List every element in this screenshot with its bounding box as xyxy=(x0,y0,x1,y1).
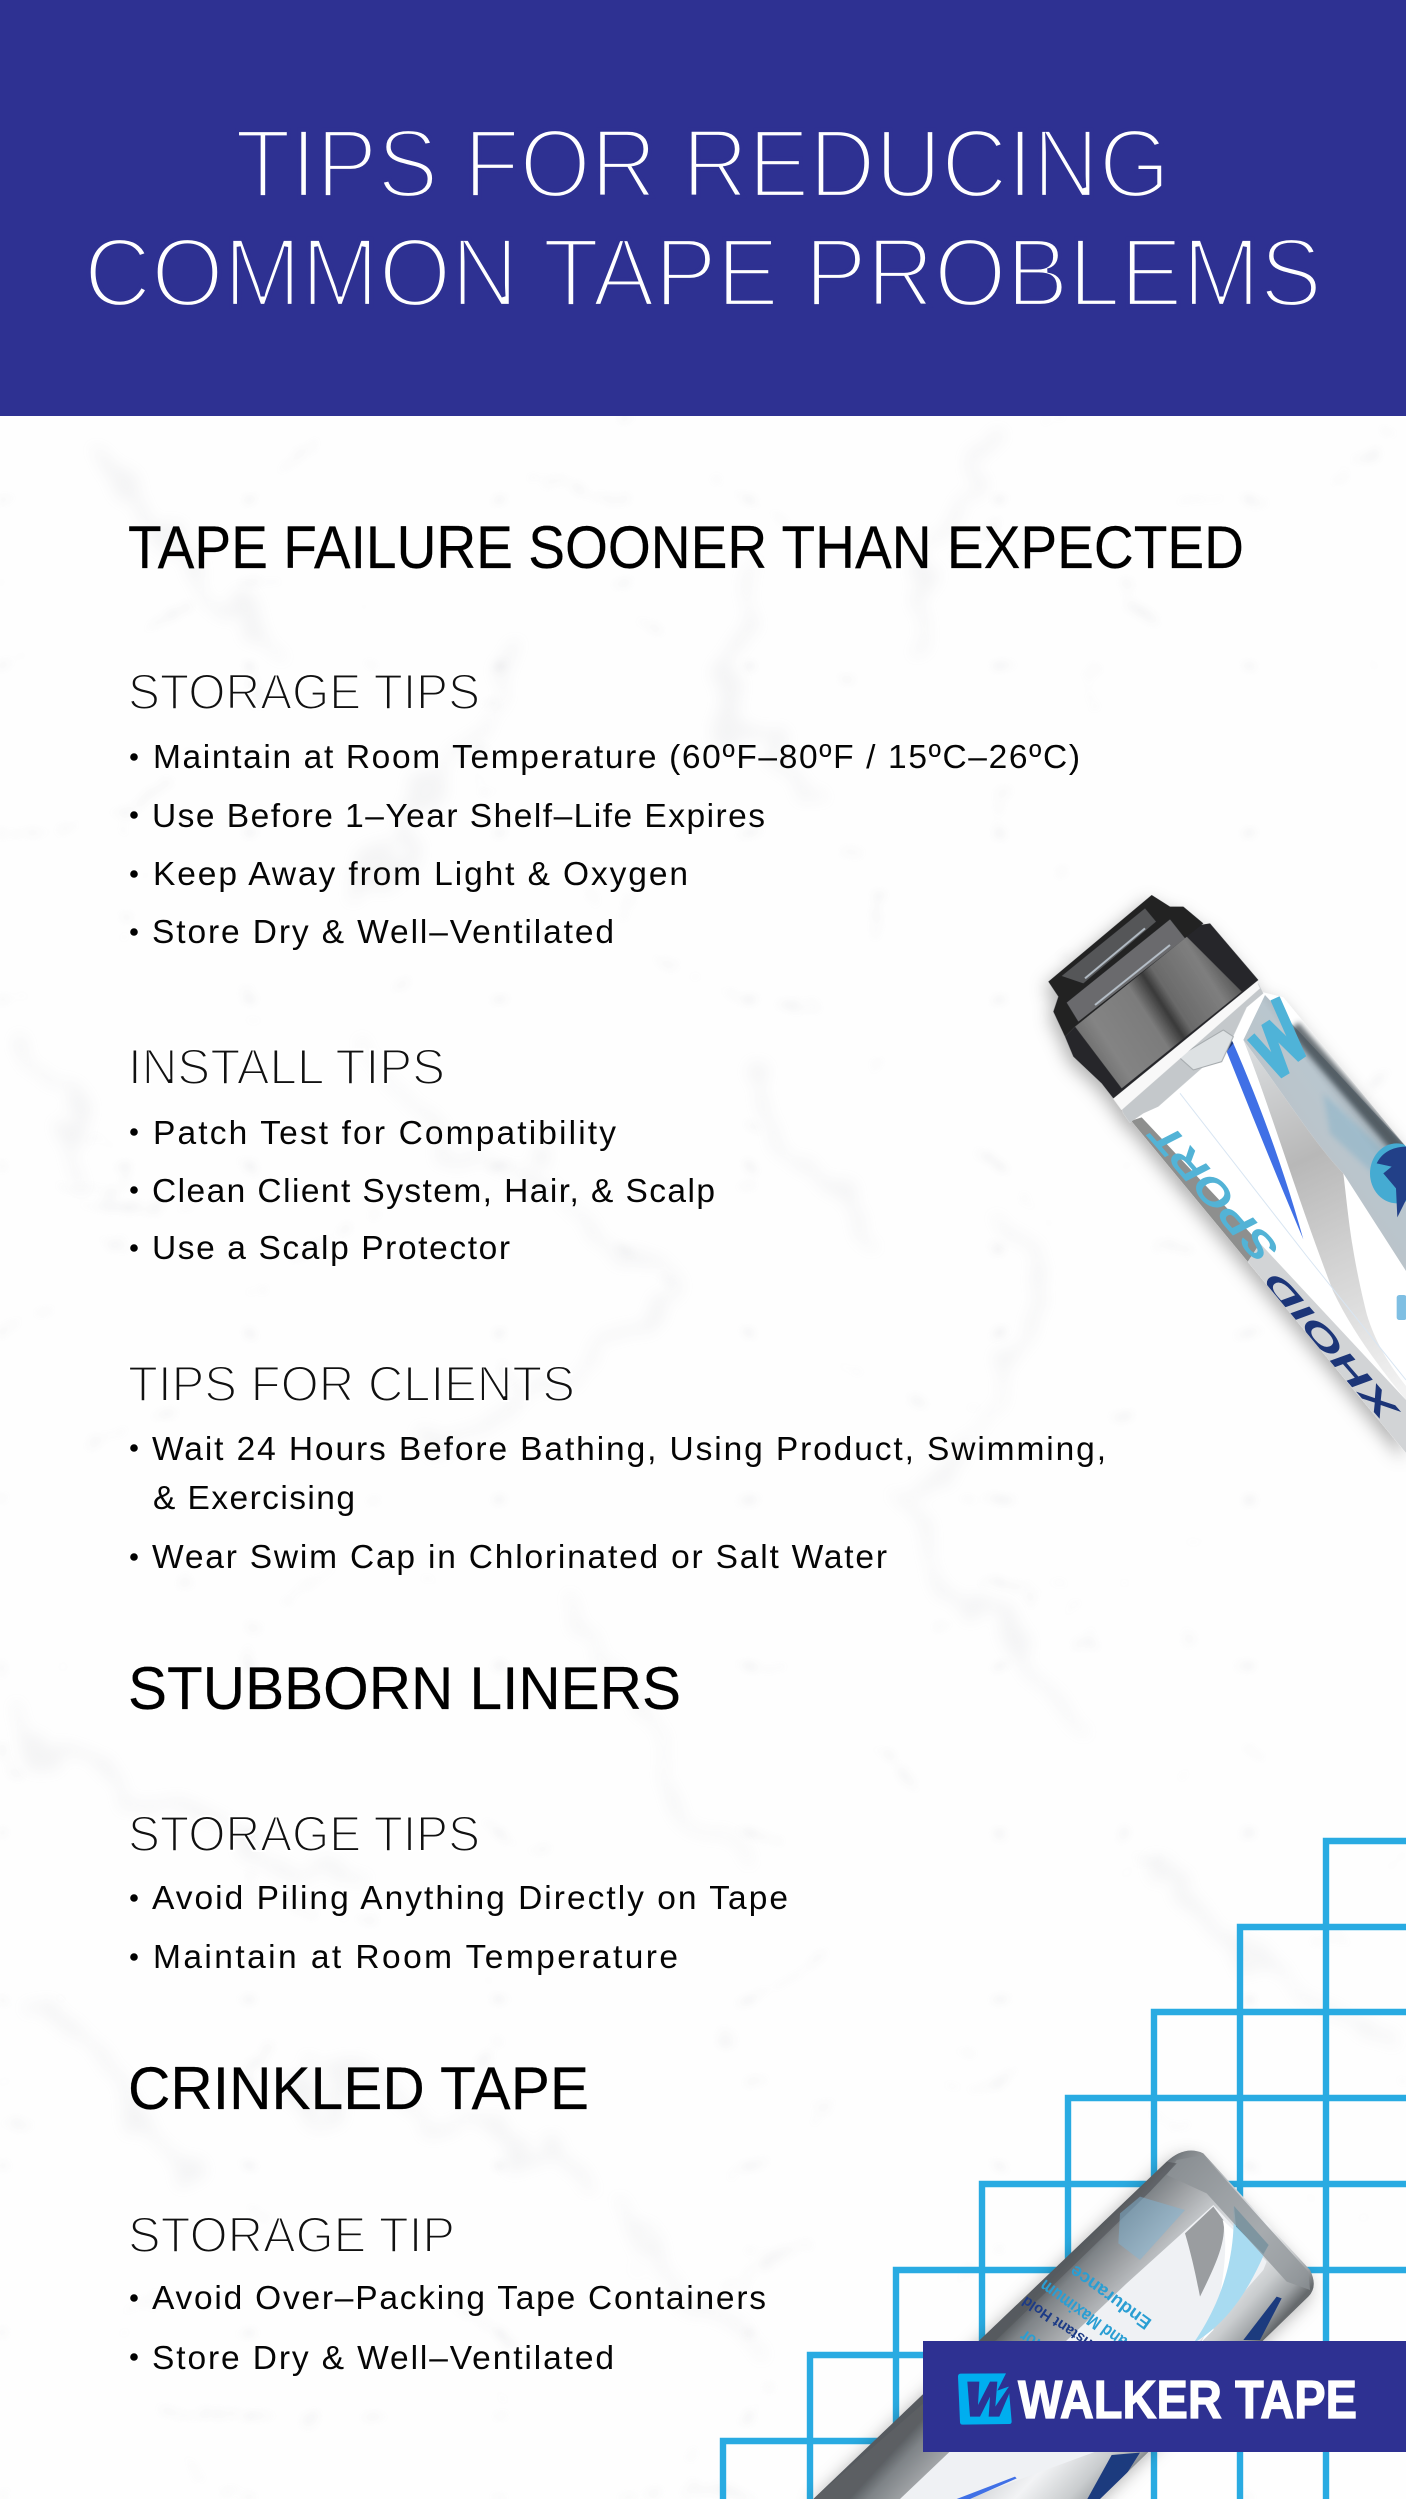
block: tips for clients: Wear Swim Cap in Chlorinated or Salt Water xyxy=(152,1539,887,1576)
block: install tips xyxy=(128,1039,715,1267)
block: install tips: Patch Test for Compatibility xyxy=(153,1115,616,1152)
section: crinkled tape xyxy=(128,2055,766,2377)
block: storage tips: Store Dry & Well–Ventilated xyxy=(152,914,614,951)
block: storage tips xyxy=(128,664,1080,951)
block: storage tips: STORAGE TIPS xyxy=(128,664,480,720)
tape bottle: lower right xyxy=(800,2130,1333,2499)
cap skirt xyxy=(1065,923,1258,1098)
block: storage tip: Store Dry & Well–Ventilated xyxy=(152,2340,614,2377)
cap rings xyxy=(1048,895,1203,1037)
block: install tips: Clean Client System, Hair, & Scalp xyxy=(152,1173,715,1210)
title: COMMON TAPE PROBLEMS xyxy=(84,218,1322,327)
title xyxy=(84,109,1322,327)
bottle label: product name: XHOID xyxy=(1257,1265,1406,1430)
block: storage tips: STORAGE TIPS xyxy=(128,1806,480,1862)
heading: crinkled tape: CRINKLED TAPE xyxy=(128,2055,589,2122)
neck xyxy=(1118,983,1263,1123)
bottle label: sport: SPORT xyxy=(1140,1111,1287,1271)
header banner xyxy=(0,0,1406,416)
block: storage tips xyxy=(128,1806,788,1976)
block: tips for clients: & Exercising xyxy=(153,1480,355,1517)
section: stubborn liners xyxy=(128,1655,788,1976)
blue stepped grid xyxy=(723,1841,1406,2499)
block: tips for clients: Wait 24 Hours Before Bathing, Using Product, Swimming, xyxy=(152,1431,1106,1468)
block: storage tip xyxy=(128,2207,766,2377)
section: tape failure sooner than expected xyxy=(128,514,1244,1576)
bottle label: endurance: for xyxy=(1016,2326,1044,2354)
wordmark: WALKER TAPE xyxy=(1018,2370,1357,2430)
block: tips for clients: TIPS FOR CLIENTS xyxy=(128,1356,575,1412)
block: storage tips: Avoid Piling Anything Directly on Tape xyxy=(152,1880,788,1917)
block: storage tips: Maintain at Room Temperature xyxy=(153,1939,678,1976)
bottle label: endurance: and Maximum xyxy=(1036,2276,1131,2352)
heading: stubborn liners: STUBBORN LINERS xyxy=(128,1655,681,1722)
tape bottle: upper right xyxy=(1048,895,1406,1463)
block: storage tips: Use Before 1–Year Shelf–Life Expires xyxy=(152,798,765,835)
block: tips for clients xyxy=(128,1356,1106,1576)
bottle label: endurance: Endurance xyxy=(1066,2261,1155,2334)
logo panel xyxy=(923,2341,1406,2452)
block: storage tips: Maintain at Room Temperature (60ºF–80ºF / 15ºC–26ºC) xyxy=(153,739,1080,776)
bottle label: endurance: Instant Hold xyxy=(1019,2292,1099,2353)
block: install tips: INSTALL TIPS xyxy=(128,1039,445,1095)
block: storage tip: Avoid Over–Packing Tape Containers xyxy=(152,2280,766,2317)
heading: tape failure: TAPE FAILURE SOONER THAN EXPECTED xyxy=(128,514,1244,581)
title: TIPS FOR REDUCING xyxy=(235,109,1170,218)
block: storage tip: STORAGE TIP xyxy=(128,2207,455,2263)
block: storage tips: Keep Away from Light & Oxygen xyxy=(153,856,688,893)
block: install tips: Use a Scalp Protector xyxy=(152,1230,510,1267)
icon: W mark xyxy=(958,2373,1012,2425)
